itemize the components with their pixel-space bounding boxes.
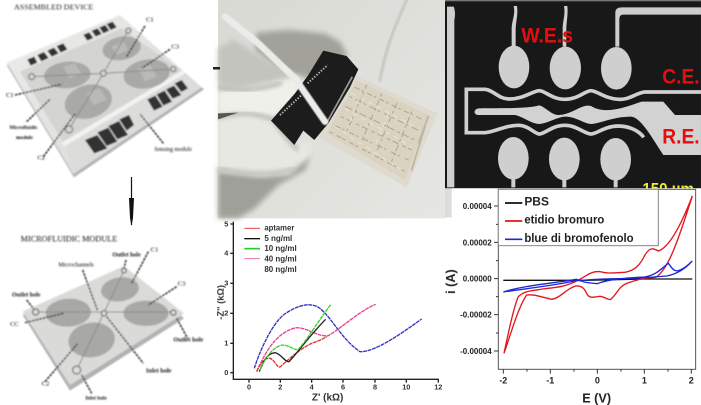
upper finger xyxy=(218,39,297,90)
legend xyxy=(244,224,297,274)
curve: aptamer xyxy=(257,337,327,372)
axis titles: Z' (kΩ) xyxy=(312,392,343,403)
labels: Sensing module xyxy=(154,146,192,153)
working electrodes top xyxy=(498,6,632,187)
labels: Outlet hole xyxy=(173,337,204,344)
labels: Microchannels xyxy=(58,263,95,269)
labels: Outlet hole xyxy=(12,293,41,299)
labels: Outlet hole xyxy=(112,253,141,259)
chart area xyxy=(452,188,701,405)
y tick labels: -0.00004 xyxy=(460,347,492,356)
white tubes xyxy=(225,0,407,122)
labels: C1 xyxy=(151,247,158,254)
labels: W.E.s, C.E., R.E.: W.E.s xyxy=(521,24,573,48)
curve: PBS xyxy=(503,279,692,280)
microchannels xyxy=(32,31,173,129)
labels: Inlet hole xyxy=(146,368,172,375)
panel: electrode chip micrograph xyxy=(445,0,701,199)
connection pads xyxy=(27,22,188,153)
curve: 5 ng/ml xyxy=(259,319,326,372)
x tick labels: 2 xyxy=(689,375,694,385)
top right trace xyxy=(615,7,701,47)
channels xyxy=(35,271,173,370)
panel: assembled device diagram xyxy=(6,3,204,177)
leader lines xyxy=(25,252,188,393)
lower glove shadow xyxy=(218,155,310,218)
labels: W.E.s, C.E., R.E. xyxy=(521,24,700,149)
x tick labels xyxy=(499,375,694,385)
legend: 40 ng/ml xyxy=(264,254,297,263)
labels: module xyxy=(16,135,34,141)
electrode ellipses xyxy=(45,275,169,360)
scale bar label: 150 µm xyxy=(642,180,694,199)
x tick labels: 8 xyxy=(373,383,377,392)
y tick labels xyxy=(224,219,229,377)
x tick labels: 1 xyxy=(642,375,647,385)
y tick labels: 2 xyxy=(224,309,228,318)
leader lines xyxy=(15,26,170,157)
axis ticks xyxy=(494,206,691,374)
axes xyxy=(230,222,439,383)
labels: C1 xyxy=(146,17,154,24)
curve: blue di bromofenolo xyxy=(503,261,692,292)
legend xyxy=(498,189,658,246)
x tick labels xyxy=(247,383,442,392)
x tick labels: 10 xyxy=(402,383,410,392)
labels xyxy=(6,17,192,162)
electrode circles xyxy=(43,33,172,124)
y tick labels: 0 xyxy=(224,368,228,377)
legend: blue di bromofenolo xyxy=(524,231,634,245)
x tick labels: 12 xyxy=(434,383,442,392)
legend: 10 ng/ml xyxy=(264,244,297,253)
labels: C3 xyxy=(178,281,186,288)
counter electrode loop xyxy=(466,89,701,137)
y tick labels: 4 xyxy=(224,249,229,258)
curve: 40 ng/ml xyxy=(257,304,376,372)
panel: microfluidic module diagram xyxy=(10,234,204,401)
heading: assembled device: ASSEMBLED DEVICE xyxy=(14,3,94,12)
x tick labels: 0 xyxy=(247,383,251,392)
labels: C2 xyxy=(37,155,45,162)
middle finger xyxy=(218,76,298,117)
legend: 80 ng/ml xyxy=(264,265,297,274)
heading: microfluidic module: MICROFLUIDIC MODULE xyxy=(21,234,117,243)
black connector xyxy=(271,51,358,145)
reference electrode xyxy=(475,102,701,155)
small dark tick at photo edge xyxy=(213,67,220,70)
module plate xyxy=(23,266,184,391)
electrode inner squares xyxy=(63,42,157,105)
legend: PBS xyxy=(524,195,549,209)
legend: etidio bromuro xyxy=(524,213,604,227)
y tick labels: 0.00004 xyxy=(463,202,492,211)
panel: impedance Nyquist chart xyxy=(216,219,442,403)
y axis title: i (A) xyxy=(444,269,458,294)
plot frame xyxy=(498,189,696,369)
thumb xyxy=(218,113,312,177)
finger fold shadows xyxy=(218,83,282,90)
y tick labels: 0.00000 xyxy=(463,275,492,284)
labels: C1 xyxy=(6,92,14,99)
curve: 80 ng/ml xyxy=(254,305,422,368)
photo background xyxy=(218,0,446,218)
y tick labels: 1 xyxy=(224,339,228,348)
curve: etidio bromuro xyxy=(504,196,692,353)
panel: cyclic voltammetry chart xyxy=(444,188,701,405)
y tick labels: 3 xyxy=(224,279,228,288)
x tick labels: 0 xyxy=(595,375,600,385)
glass microchip xyxy=(318,76,438,187)
legend: aptamer xyxy=(264,224,294,233)
legend: 5 ng/ml xyxy=(264,234,292,243)
gloved hand xyxy=(218,30,348,218)
labels: CC xyxy=(10,321,19,328)
labels: C3 xyxy=(171,44,180,51)
x tick labels: -1 xyxy=(546,375,554,385)
y tick labels xyxy=(460,202,492,356)
arrow: assembly to module xyxy=(129,177,134,226)
working electrodes bottom xyxy=(498,137,529,180)
x tick labels: 4 xyxy=(310,383,315,392)
x tick labels: 2 xyxy=(278,383,282,392)
device plate xyxy=(7,15,204,177)
dark finger gap xyxy=(218,113,238,119)
labels xyxy=(10,247,204,401)
x tick labels: -2 xyxy=(499,375,507,385)
curve: 10 ng/ml xyxy=(260,304,331,370)
x tick labels: 6 xyxy=(341,383,345,392)
labels: Microfluidic xyxy=(9,125,38,131)
labels: Inlet hole xyxy=(85,395,107,401)
glove back xyxy=(255,30,348,80)
panel: photo of device in gloved hand xyxy=(218,0,446,218)
panel: impedance Nyquist chart: -Z'' (kΩ) xyxy=(216,285,226,320)
chip background xyxy=(445,0,701,188)
y tick labels: -0.00002 xyxy=(460,311,492,320)
labels: C2 xyxy=(42,380,49,387)
left light strip xyxy=(445,189,452,217)
left margin strip xyxy=(447,7,455,187)
y tick labels: 5 xyxy=(224,219,228,228)
y tick labels: 0.00002 xyxy=(463,238,492,247)
